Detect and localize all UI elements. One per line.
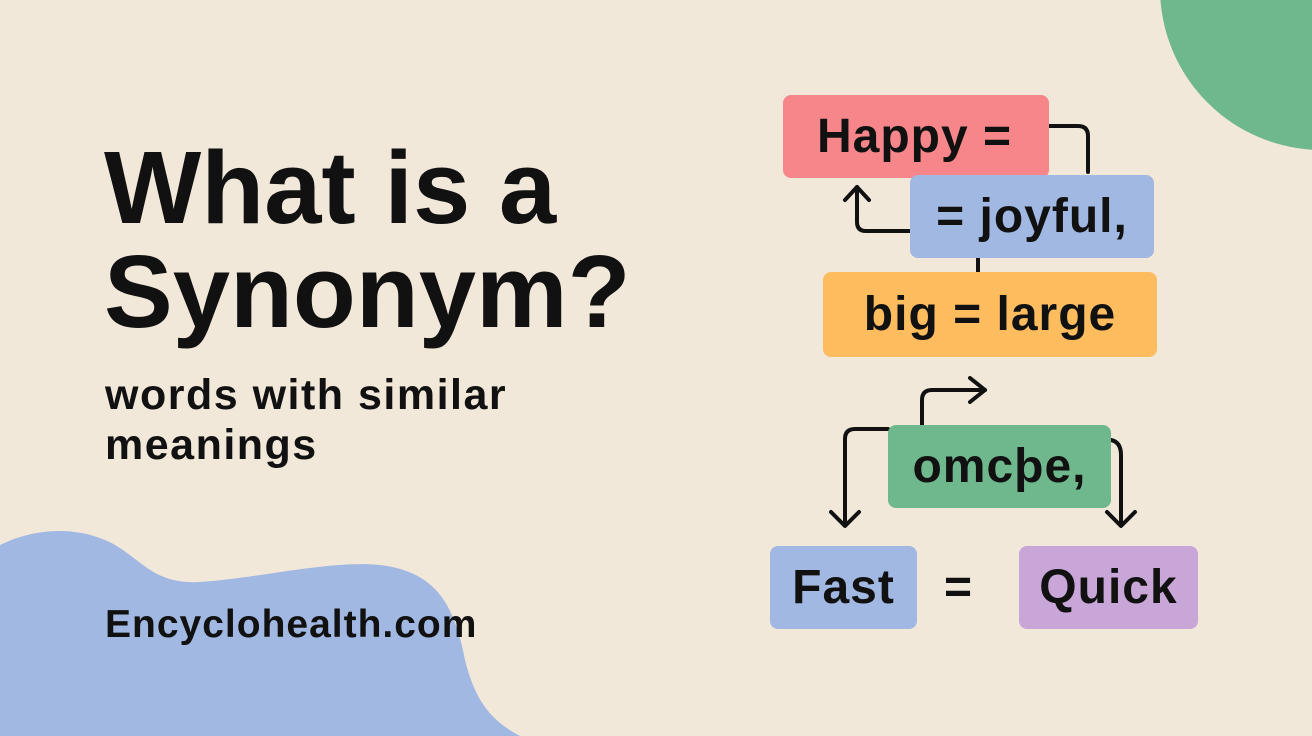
- arrow: green up right: [922, 378, 985, 425]
- box: Fast: Fast: [792, 561, 895, 614]
- blue blob bottom left: [0, 531, 520, 736]
- website: Encyclohealth.com: [105, 603, 477, 646]
- box: joyful: = joyful,: [936, 190, 1128, 243]
- subtitle: meanings: [105, 421, 318, 469]
- connector: joyful to big: [976, 258, 980, 272]
- title: [104, 130, 631, 349]
- box: Fast: [770, 546, 917, 629]
- arrow: green to quick: [1107, 440, 1135, 526]
- box: Quick: Quick: [1039, 561, 1178, 614]
- box: green word: [888, 425, 1111, 508]
- equals sign: =: [944, 561, 972, 614]
- box: Quick: [1019, 546, 1198, 629]
- arrow: joyful back to happy: [845, 187, 910, 231]
- box: Happy: Happy =: [817, 110, 1012, 163]
- title: Synonym?: [104, 234, 631, 349]
- subtitle: words with similar: [105, 371, 507, 419]
- box: green word: omcþe,: [912, 440, 1087, 493]
- green circle top right: [1160, 0, 1312, 150]
- arrow: happy to joyful: [1049, 126, 1088, 172]
- arrow: green to fast: [831, 429, 888, 526]
- subtitle: [104, 371, 507, 469]
- box: big = large: big = large: [864, 288, 1116, 341]
- box: Happy: [783, 95, 1049, 178]
- box: joyful: [910, 175, 1154, 258]
- title: What is a: [104, 130, 556, 245]
- box: big = large: [823, 272, 1157, 357]
